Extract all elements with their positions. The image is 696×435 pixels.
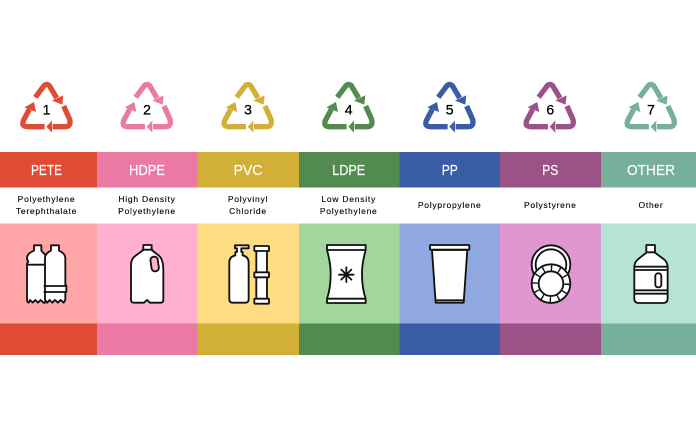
- description: Chloride: [229, 206, 267, 216]
- column 1: PETE: [0, 84, 97, 355]
- heading PVC: PVC: [234, 163, 262, 179]
- number 4: 4: [345, 102, 353, 118]
- icon: pump bottle and pipe: [229, 245, 269, 304]
- recycling symbol 1: [23, 84, 70, 133]
- description: High Density: [118, 194, 176, 204]
- heading PS: PS: [542, 163, 558, 179]
- heading PETE: [0, 152, 97, 188]
- description: Polypropylene: [418, 200, 482, 210]
- light panel: [601, 224, 696, 324]
- light panel: [299, 224, 400, 324]
- description: [228, 194, 268, 216]
- dark footer: [500, 324, 601, 355]
- heading PP: [400, 152, 500, 188]
- column 6: PS: [500, 84, 601, 355]
- column 3: PVC: [198, 84, 299, 355]
- light panel: [500, 224, 601, 324]
- number 3: 3: [244, 102, 252, 118]
- dark footer: [601, 324, 696, 355]
- description: Polyethylene: [118, 206, 176, 216]
- number 5: 5: [446, 102, 454, 118]
- description: Terephthalate: [16, 206, 77, 216]
- heading HDPE: HDPE: [129, 163, 165, 179]
- icon: plastic bag: [327, 245, 366, 303]
- icon: two plastic bottles: [27, 245, 66, 303]
- icon: water cooler jug: [634, 245, 668, 303]
- number 2: 2: [143, 102, 151, 118]
- heading HDPE: [97, 152, 198, 188]
- recycling symbol 3: [224, 84, 271, 133]
- column 4: LDPE: [299, 84, 400, 355]
- light panel: [97, 224, 198, 324]
- light panel: [0, 224, 97, 324]
- light panel: [198, 224, 299, 324]
- description: Low Density: [321, 194, 376, 204]
- description: Polyethylene: [18, 194, 75, 204]
- light panel: [400, 224, 500, 324]
- heading OTHER: OTHER: [627, 163, 675, 179]
- number 6: 6: [546, 102, 554, 118]
- recycling symbol 5: [426, 84, 473, 133]
- recycling symbol 2: [123, 84, 170, 133]
- description: [118, 194, 176, 216]
- column 7: OTHER: [601, 84, 696, 355]
- icon: plastic plates: [532, 245, 570, 303]
- icon: plastic cup: [430, 245, 469, 303]
- recycling symbol 6: [526, 84, 573, 133]
- heading OTHER: [601, 152, 696, 188]
- heading LDPE: LDPE: [332, 163, 365, 179]
- column 5: PP: [400, 84, 500, 355]
- icon: milk jug: [131, 245, 163, 303]
- heading LDPE: [299, 152, 400, 188]
- recycling symbol 7: [627, 84, 674, 133]
- number 1: 1: [43, 102, 51, 118]
- dark footer: [299, 324, 400, 355]
- description: Polyvinyl: [228, 194, 268, 204]
- dark footer: [0, 324, 97, 355]
- description: Polystyrene: [524, 200, 577, 210]
- number 7: 7: [647, 102, 655, 118]
- description: Polyethylene: [320, 206, 378, 216]
- description: [16, 194, 77, 216]
- heading PETE: PETE: [31, 163, 62, 179]
- dark footer: [198, 324, 299, 355]
- dark footer: [97, 324, 198, 355]
- description: Other: [638, 200, 664, 210]
- recycling symbol 4: [325, 84, 372, 133]
- column 2: HDPE: [97, 84, 198, 355]
- description: [320, 194, 378, 216]
- heading PVC: [198, 152, 299, 188]
- heading PS: [500, 152, 601, 188]
- dark footer: [400, 324, 500, 355]
- heading PP: PP: [442, 163, 458, 179]
